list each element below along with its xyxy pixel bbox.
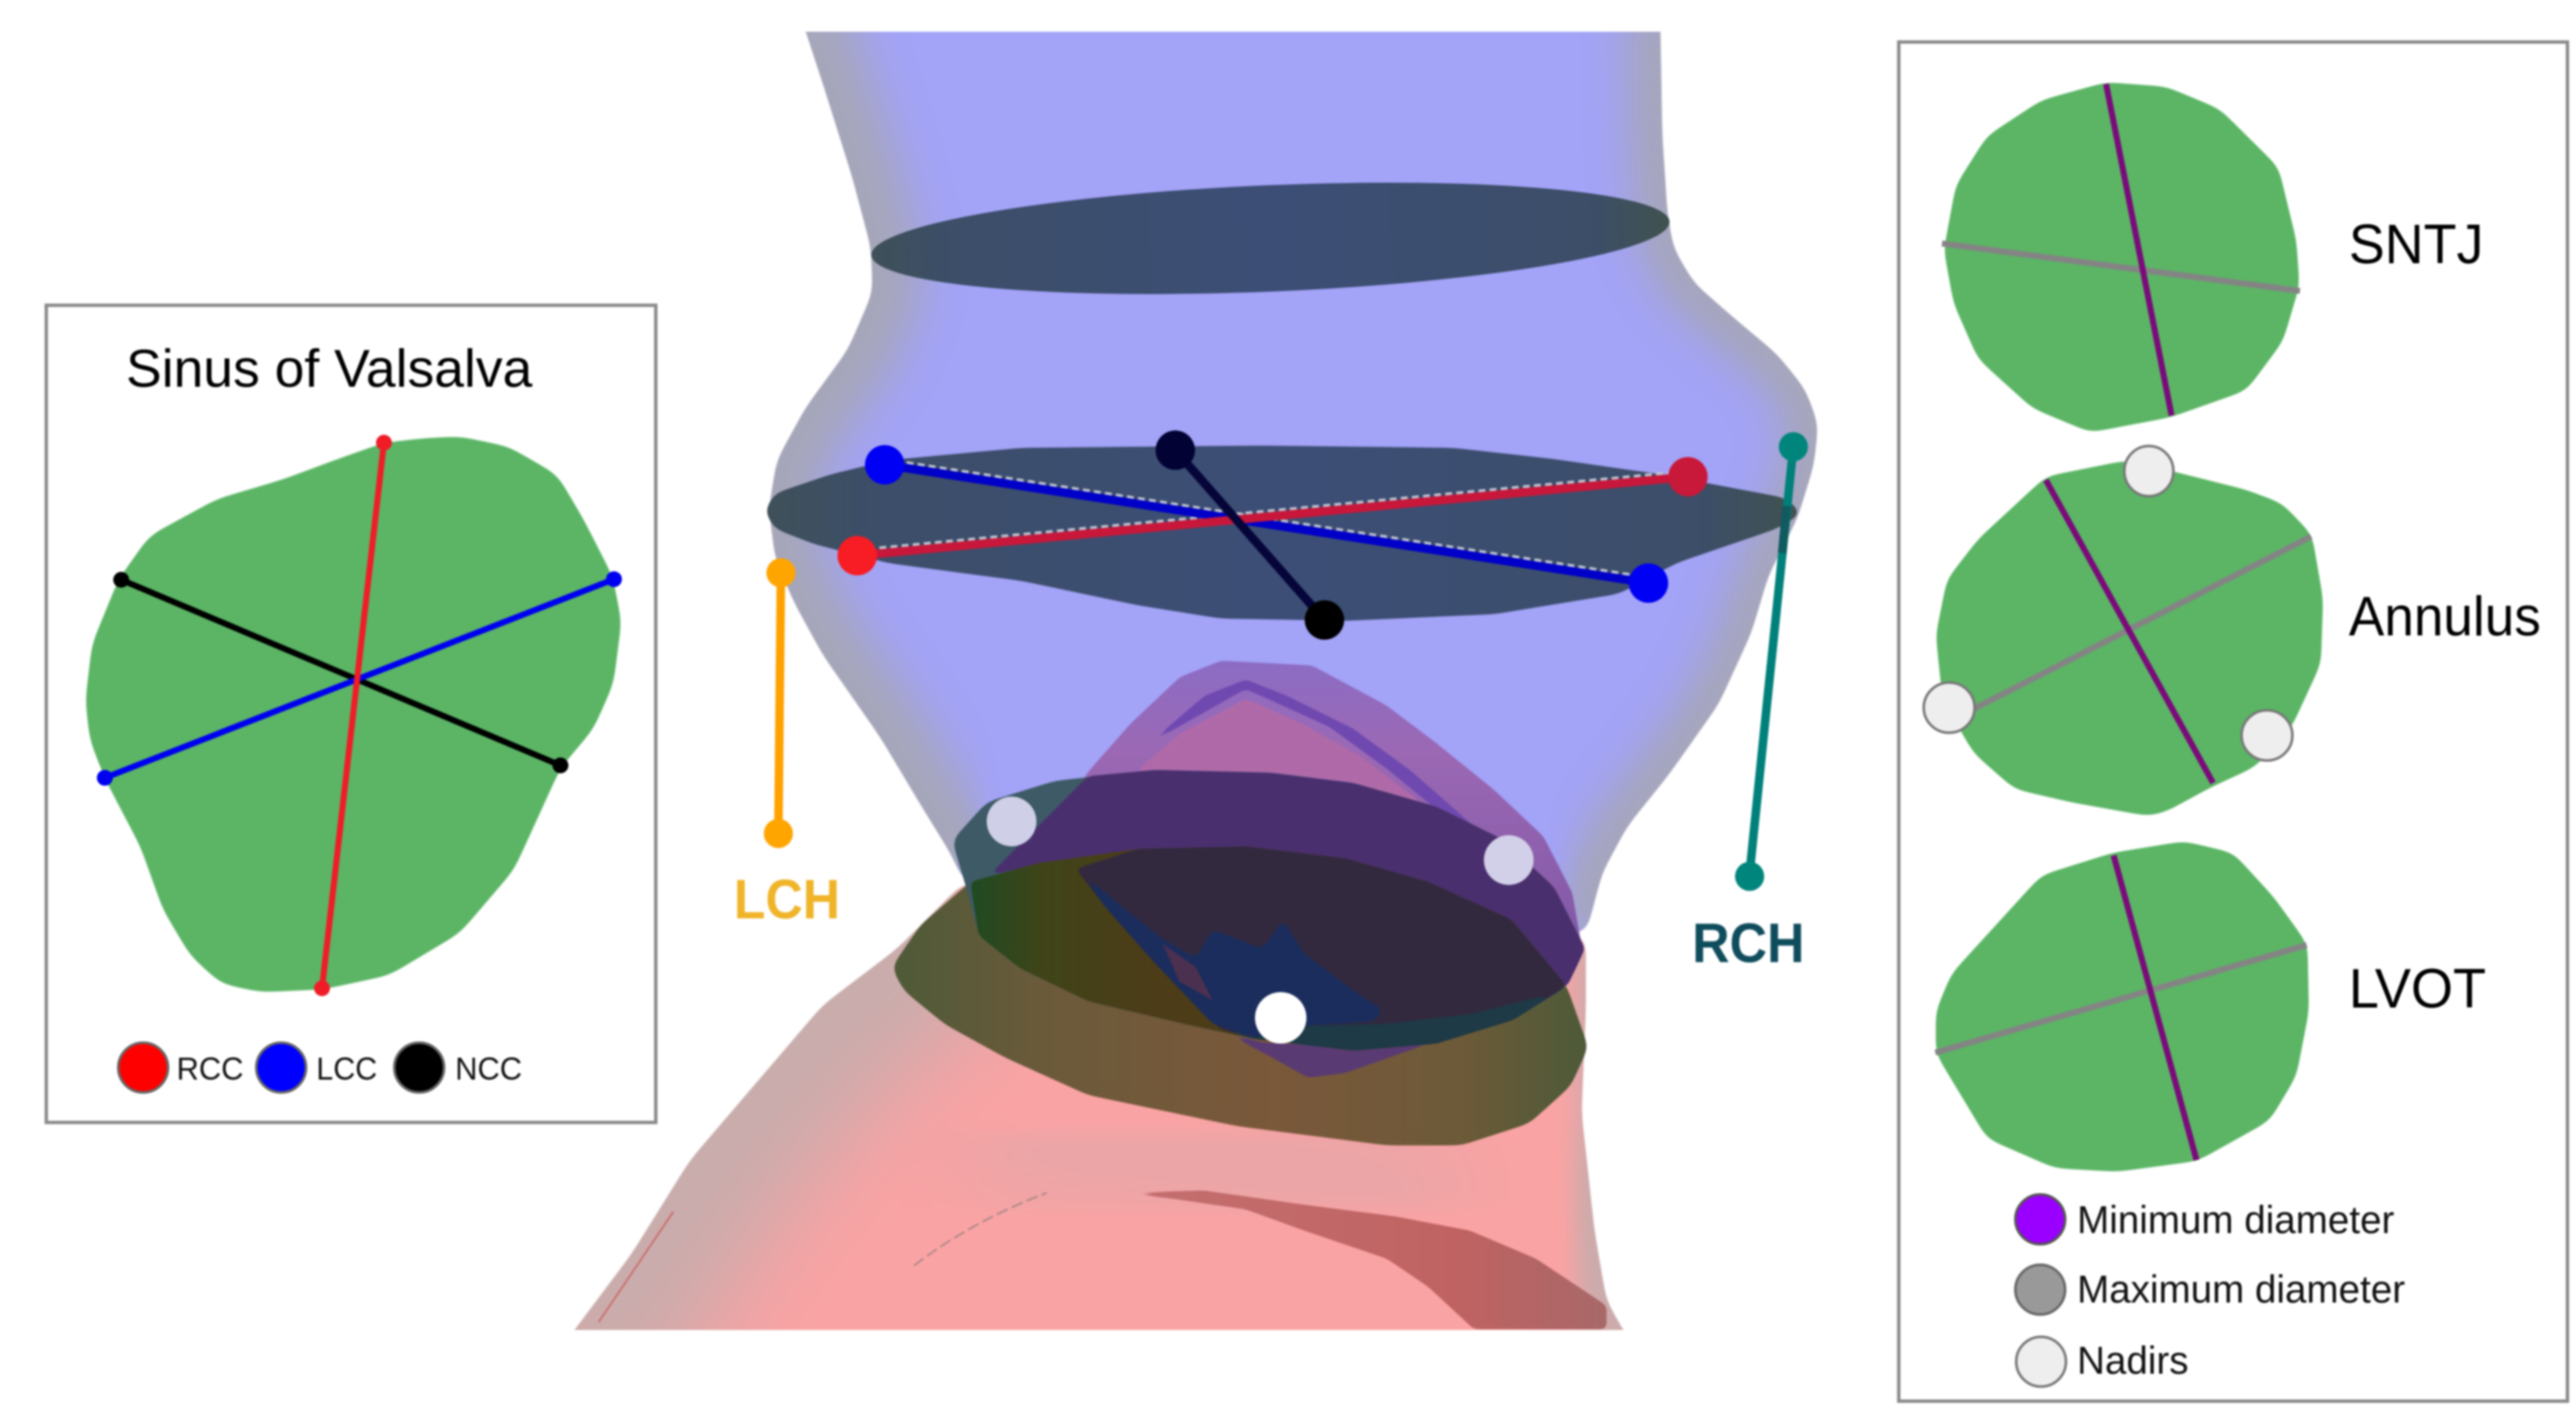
annulus cross-section xyxy=(1924,446,2323,816)
right coronary height: RCH xyxy=(1692,912,1804,974)
panel: sinus of Valsalva xyxy=(46,305,656,1122)
section labels: LVOT xyxy=(2349,957,2486,1020)
legend: cusps: LCC xyxy=(316,1051,377,1086)
legend: cusps xyxy=(118,1043,522,1092)
lower leaflet tip xyxy=(1221,1031,1444,1078)
left coronary height: LCH xyxy=(734,868,840,930)
heading: Sinus of Valsalva: Sinus of Valsalva xyxy=(126,340,533,399)
section labels: SNTJ xyxy=(2349,213,2483,275)
section labels: Annulus xyxy=(2349,585,2541,647)
legend: diameters and nadirs: Maximum diameter xyxy=(2077,1267,2405,1311)
legend: diameters and nadirs xyxy=(2015,1194,2405,1387)
sinus plane xyxy=(765,446,1803,621)
left coronary height xyxy=(734,558,840,930)
right coronary height xyxy=(1692,432,1808,974)
legend: diameters and nadirs: Minimum diameter xyxy=(2077,1198,2394,1242)
legend: cusps: NCC xyxy=(455,1051,522,1086)
LVOT cross-section xyxy=(1936,841,2309,1172)
legend: diameters and nadirs: Nadirs xyxy=(2077,1339,2189,1382)
SNTJ cross-section xyxy=(1942,82,2300,432)
nadir points xyxy=(987,797,1534,1044)
section labels xyxy=(2349,213,2541,1020)
aortic valve leaflets and annulus and LVOT planes xyxy=(892,659,1588,1146)
LVOT plane xyxy=(892,846,1588,1146)
annulus over leaflet xyxy=(988,770,1585,987)
leaflet ridge xyxy=(1138,678,1486,836)
annulus lower edge sliver xyxy=(1221,986,1567,1050)
overlap of annulus and LVOT, left side xyxy=(970,846,1567,1050)
3D aortic root model xyxy=(540,0,1818,1375)
pink surface fold xyxy=(598,1190,1606,1329)
leaflet outer xyxy=(981,659,1583,1078)
sinus cross-section with cusp lines xyxy=(86,435,621,996)
leaflet inner body xyxy=(1130,697,1437,812)
overlap of annulus and LVOT, right side xyxy=(1076,846,1567,1050)
diameter lines with endpoints xyxy=(838,430,1708,640)
annulus plane xyxy=(952,770,1585,1050)
legend: cusps: RCC xyxy=(177,1051,243,1086)
aorta (blue surface) xyxy=(769,0,1818,935)
left ventricle outflow (pink surface) xyxy=(574,885,1624,1331)
central orifice xyxy=(1080,871,1383,1038)
SNTJ plane xyxy=(869,169,1672,308)
panel: SNTJ, annulus and LVOT xyxy=(1899,42,2567,1401)
